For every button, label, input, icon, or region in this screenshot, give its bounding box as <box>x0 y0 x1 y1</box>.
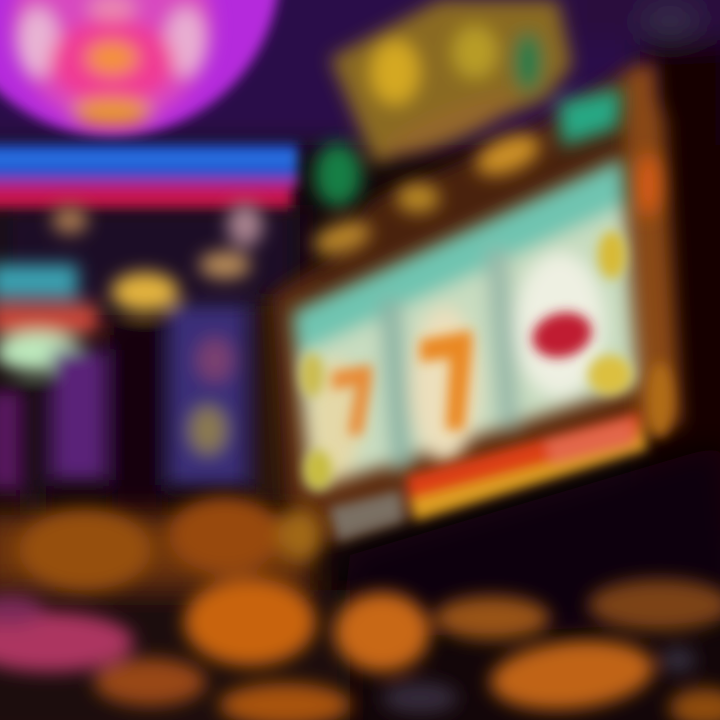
payout tray: red and yellow base <box>328 362 673 542</box>
background: purple upper wall <box>0 0 720 540</box>
reel screen <box>292 158 638 490</box>
reel symbols: orange sevens and red cherry <box>300 231 632 490</box>
slot machine <box>272 0 682 545</box>
dark shadow below the machine <box>340 445 720 640</box>
machine frame <box>272 62 682 545</box>
neon stripes: blue and crimson <box>0 144 298 208</box>
machine crown: gold and green top <box>309 0 660 262</box>
background machines: lights and panels <box>0 203 286 515</box>
coins: individual orange discs <box>0 497 720 720</box>
coins: shaded pile base <box>0 515 350 720</box>
neon sign: magenta circle with flower <box>0 0 280 136</box>
